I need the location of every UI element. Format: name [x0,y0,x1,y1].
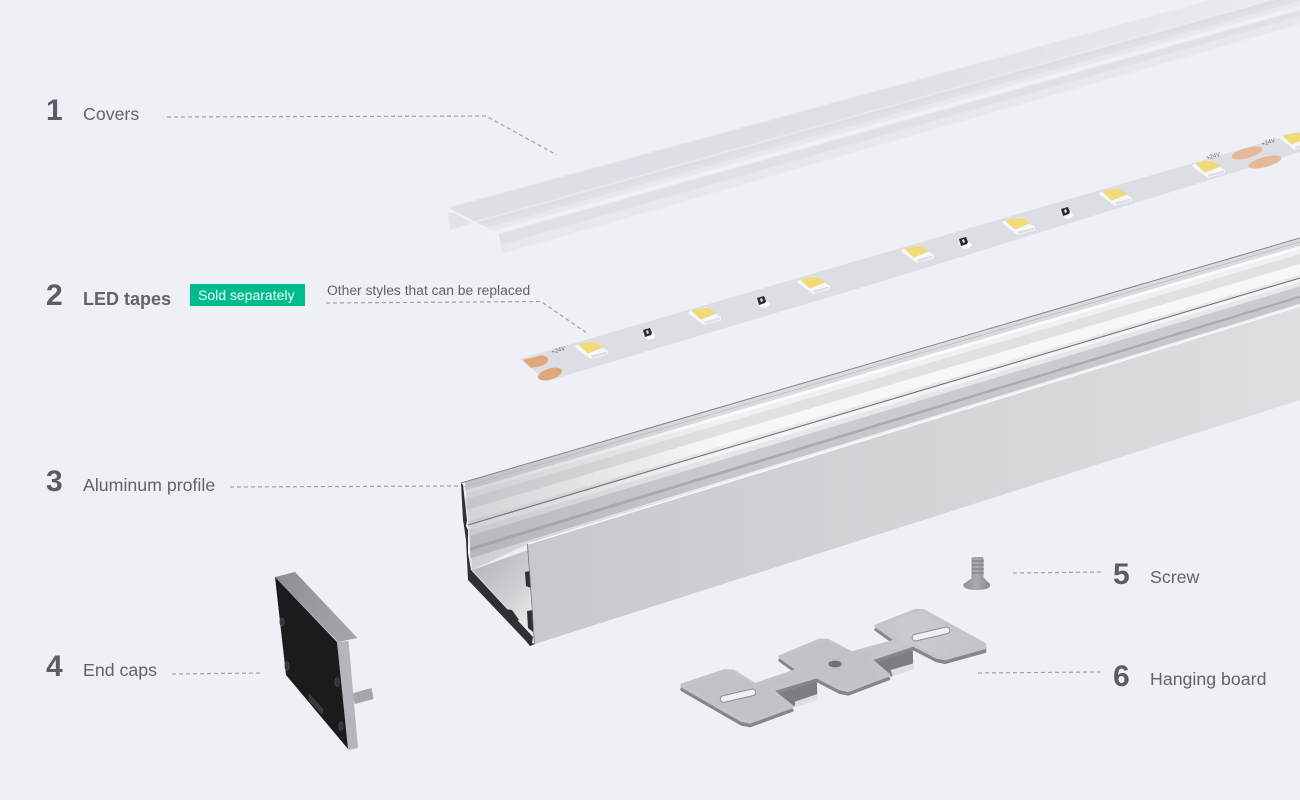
note other styles: Other styles that can be replaced [327,282,530,298]
leader line 1 [167,116,557,155]
callout 2: LED tapes [46,279,586,332]
number 5: 5 [1113,558,1130,591]
board thickness [682,614,985,726]
leader line 3 [230,486,460,487]
leader line 6 [978,672,1100,673]
component: hanging board [682,611,985,726]
tape printing: +24V [551,346,566,356]
component: LED tape [520,132,1300,383]
copper pads right [1230,144,1283,171]
board top plate [682,611,985,722]
label aluminum profile: Aluminum profile [83,475,215,495]
tape printing: +24V [1261,138,1276,148]
profile outlines [461,238,1300,525]
callout 6: hanging board [978,660,1266,693]
profile dark cross-section edges [461,483,535,646]
tape strip [520,132,1300,381]
callout 4: end caps [46,650,260,683]
resistors [642,207,1074,340]
number 3: 3 [46,465,63,498]
leader line 5 [1013,572,1101,573]
label screw: Screw [1150,567,1199,587]
label end caps: End caps [83,660,157,680]
number 4: 4 [46,650,63,683]
cap top [275,572,358,642]
board shadow channels [772,646,913,707]
cap fasteners [280,618,343,730]
LED chips [575,132,1300,359]
screw head [963,578,990,590]
number 2: 2 [46,279,63,312]
cap black face [275,577,348,749]
profile interior floor [472,550,531,634]
profile upper channel [465,238,1300,526]
component: aluminum profile [461,238,1300,646]
label LED tapes: LED tapes [83,289,171,309]
badge sold separately [190,284,305,306]
tape printing [551,138,1276,356]
screw shank [972,557,984,580]
label hanging board: Hanging board [1150,669,1266,689]
number 6: 6 [1113,660,1130,693]
leader line 4 [172,673,260,674]
number 1: 1 [46,94,63,127]
component: end cap [275,572,374,750]
callout 3: aluminum profile [46,465,460,498]
profile front panel [528,306,1300,644]
callout 1: covers [46,94,557,155]
badge sold separately: Sold separately [198,287,295,303]
component: screw [963,557,990,590]
profile lower channel [470,278,1300,569]
tape printing: +24V [1206,152,1221,162]
cap side [337,641,358,750]
cap tab [352,688,374,704]
leader line 2 [326,302,586,332]
left end shading [465,407,720,570]
component: cover [447,0,1300,254]
panel highlight [528,306,1300,544]
board slots and hole [720,626,951,703]
callout 5: screw [1013,558,1199,591]
label covers: Covers [83,104,139,124]
copper pads left [523,356,564,383]
